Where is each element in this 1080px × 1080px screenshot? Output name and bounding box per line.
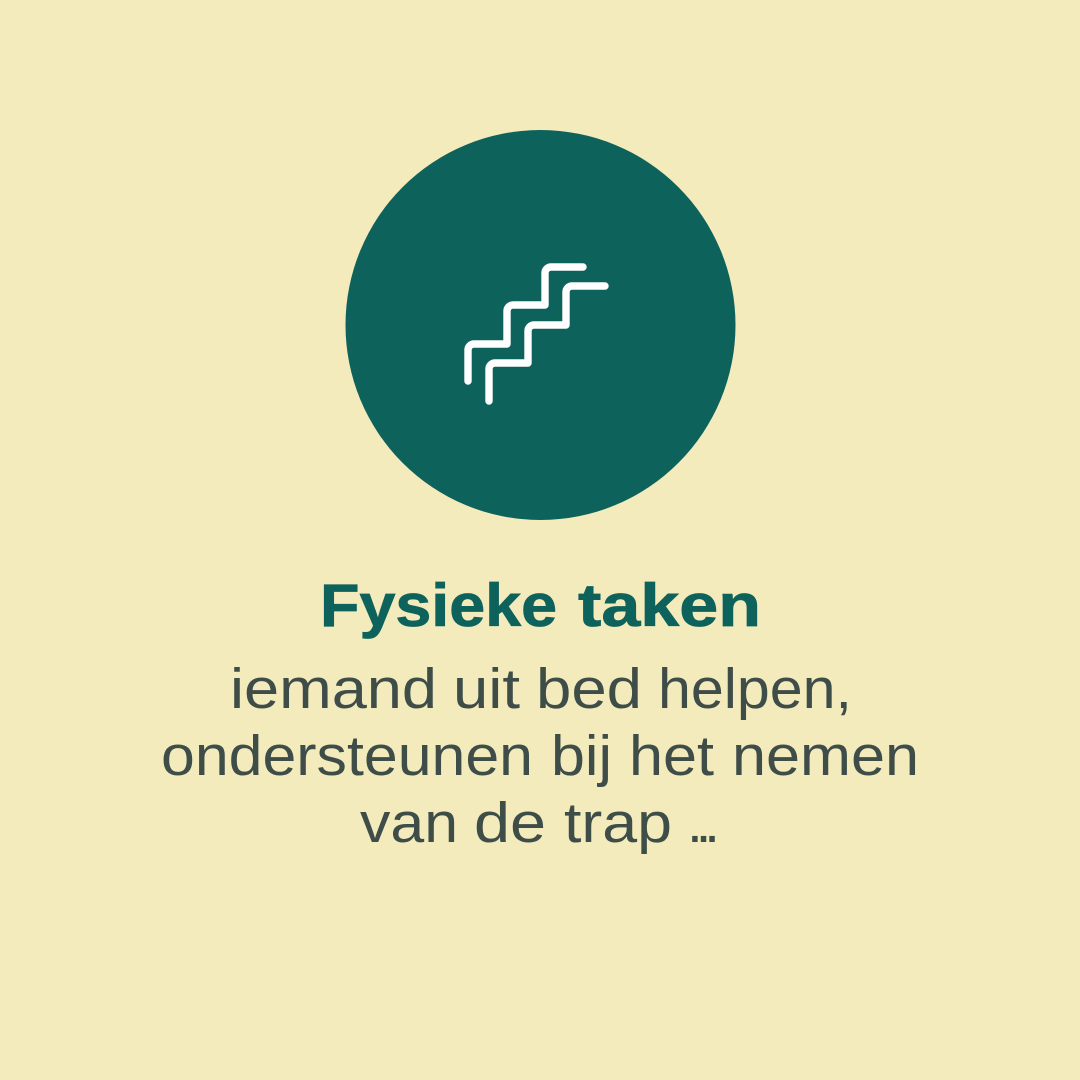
text block: description: van xyxy=(360,791,458,855)
text block: description: het xyxy=(629,724,714,788)
title xyxy=(320,572,761,639)
text block: description: bij xyxy=(551,724,612,788)
text block: description: iemand xyxy=(230,657,437,721)
text block: description: ... xyxy=(687,791,720,855)
text block: description: nemen xyxy=(732,724,919,788)
text block: description: uit xyxy=(453,657,520,721)
teal circle xyxy=(346,130,736,520)
text block: description: de xyxy=(474,791,546,855)
text block: description xyxy=(161,657,919,855)
text block: description: bed xyxy=(536,657,642,721)
text block: description: trap xyxy=(564,791,672,855)
text block: description: ondersteunen xyxy=(161,724,533,788)
icon: stairs xyxy=(468,267,605,401)
title: Fysieke xyxy=(320,572,557,639)
title: taken xyxy=(578,572,761,639)
icon: stairs in teal circle xyxy=(346,130,736,520)
text block: description: helpen, xyxy=(658,657,852,721)
